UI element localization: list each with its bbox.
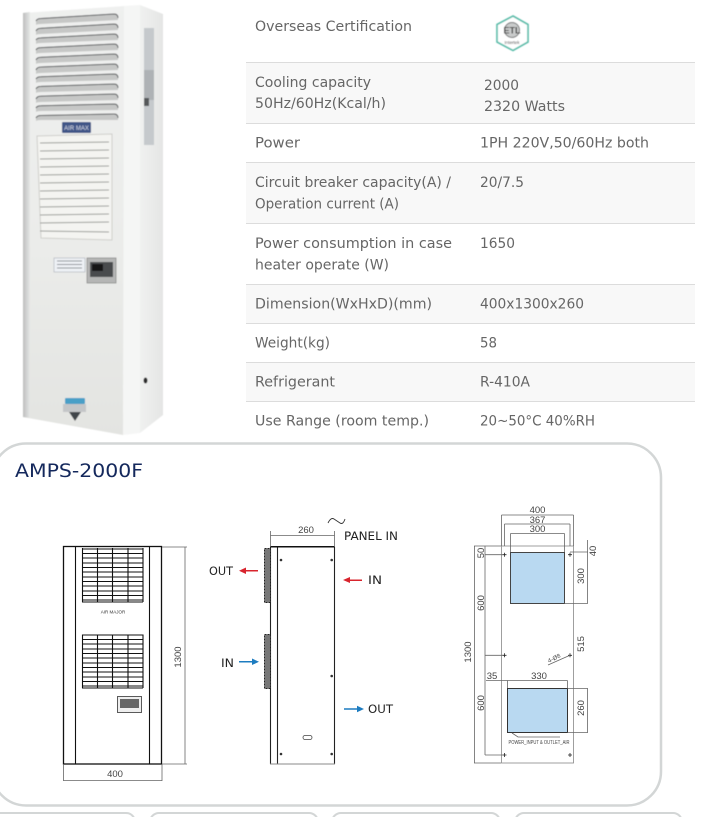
row: weight: Weight(kg) <box>255 336 330 352</box>
dimension lines <box>474 515 588 763</box>
icon: ETL certification badge: ETL <box>504 26 521 36</box>
top dimensions <box>530 505 545 535</box>
left dimensions: 600 <box>476 695 487 711</box>
arrow: blue in <box>239 658 259 665</box>
row: power consumption: 1650 <box>480 236 515 252</box>
row: power: 1PH 220V,50/60Hz both <box>480 136 649 152</box>
row: cooling capacity: 2320 Watts <box>484 99 565 115</box>
right dimensions: 300 <box>576 568 587 584</box>
depth dimension <box>270 525 334 547</box>
row: dimension: 400x1300x260 <box>480 296 584 312</box>
hole note: 4-Ø8 <box>547 653 562 665</box>
row: cooling capacity <box>255 75 565 115</box>
row: dimension <box>255 296 584 312</box>
unit side face <box>140 5 163 433</box>
row: refrigerant: Refrigerant <box>255 374 336 390</box>
width dimension <box>64 764 162 781</box>
row: power consumption <box>255 236 515 274</box>
unit left edge <box>23 12 30 418</box>
row: cooling capacity: 2000 <box>484 78 519 94</box>
in label left: IN <box>221 656 234 670</box>
row: refrigerant: R-410A <box>480 374 530 390</box>
specification table <box>246 16 695 430</box>
front logo: AIR MAJOR <box>101 610 126 614</box>
upper fin <box>264 548 270 602</box>
row: use range <box>255 414 595 430</box>
top dimensions: 300 <box>530 524 545 535</box>
row: cooling capacity: Cooling capacity <box>255 75 371 91</box>
controller display <box>87 258 116 283</box>
warning label <box>54 258 85 272</box>
row: power consumption: heater operate (W) <box>255 258 389 274</box>
cut-out lower <box>508 688 568 732</box>
width dimension: 400 <box>107 769 123 780</box>
product photo: cooling unit <box>23 5 163 435</box>
table row backgrounds <box>246 63 695 401</box>
row: use range: 20~50°C 40%RH <box>480 414 595 430</box>
panel in label: PANEL IN <box>344 529 398 543</box>
arrow: blue out <box>344 706 364 712</box>
right dimensions: 40 <box>588 546 599 556</box>
row: circuit breaker <box>255 175 524 212</box>
row: power consumption: Power consumption in case <box>255 236 452 252</box>
row: circuit breaker: 20/7.5 <box>480 175 524 191</box>
vent hole <box>144 378 148 384</box>
left dimensions: 50 <box>476 548 487 558</box>
row: dimension: Dimension(WxHxD)(mm) <box>255 296 432 312</box>
row: circuit breaker: Circuit breaker capacity(A) / <box>255 175 451 191</box>
out label top: OUT <box>209 564 234 578</box>
row: overseas certification: Overseas Certification <box>255 19 412 35</box>
lower dimensions: 35 <box>487 671 497 682</box>
row: weight: 58 <box>480 336 497 352</box>
row: power <box>255 136 649 152</box>
air note: POWER_INPUT & OUTLET_AIR <box>508 740 570 746</box>
row: circuit breaker: Operation current (A) <box>255 196 399 212</box>
left dimensions <box>463 548 487 711</box>
arrow: red out <box>239 568 258 574</box>
logo badge <box>62 122 91 133</box>
row: weight <box>255 336 497 352</box>
bottom badge <box>63 398 86 421</box>
drawing: side view <box>209 518 398 764</box>
side label <box>144 28 154 145</box>
screws <box>280 559 333 755</box>
arrow: red in <box>343 577 362 583</box>
model heading: AMPS-2000F <box>15 460 143 482</box>
upper front grille <box>82 548 143 602</box>
left dimensions: 1300 <box>463 641 474 663</box>
top dimensions: 400 <box>530 505 545 516</box>
right dimensions: 260 <box>576 700 587 716</box>
row: cooling capacity: 50Hz/60Hz(Kcal/h) <box>255 96 386 112</box>
mounting screws <box>502 553 572 757</box>
next panels row (cropped) <box>0 813 682 817</box>
unit front face <box>23 6 125 435</box>
drawing: front view <box>64 546 187 781</box>
top dimensions: 367 <box>530 515 545 526</box>
in label right: IN <box>368 573 382 587</box>
lower grille panel <box>37 134 112 240</box>
row: refrigerant <box>255 374 530 390</box>
right dimensions <box>576 546 599 716</box>
lower front grille <box>82 634 143 688</box>
upper louvers <box>36 14 118 121</box>
out label bottom: OUT <box>368 702 394 716</box>
lower dimensions <box>487 671 547 682</box>
slot <box>303 736 312 740</box>
height dimension <box>162 547 187 764</box>
row: use range: Use Range (room temp.) <box>255 414 429 430</box>
row: power: Power <box>255 136 300 152</box>
logo badge: AIR MAX <box>64 126 89 132</box>
drawing: panel cut-out layout <box>463 505 599 763</box>
lower fin <box>264 634 270 688</box>
icon: ETL certification badge: Intertek <box>504 40 520 45</box>
panel: AMPS-2000F drawings <box>0 444 661 806</box>
lower dimensions: 330 <box>531 671 547 682</box>
height dimension: 1300 <box>173 646 184 668</box>
right dimensions: 515 <box>576 636 587 652</box>
wave mark <box>328 518 345 524</box>
depth dimension: 260 <box>298 525 314 536</box>
icon: ETL certification badge <box>497 16 528 50</box>
left dimensions: 600 <box>476 595 487 611</box>
unit bevel <box>123 5 140 435</box>
front controller <box>118 696 142 712</box>
cut-out upper <box>510 552 564 604</box>
